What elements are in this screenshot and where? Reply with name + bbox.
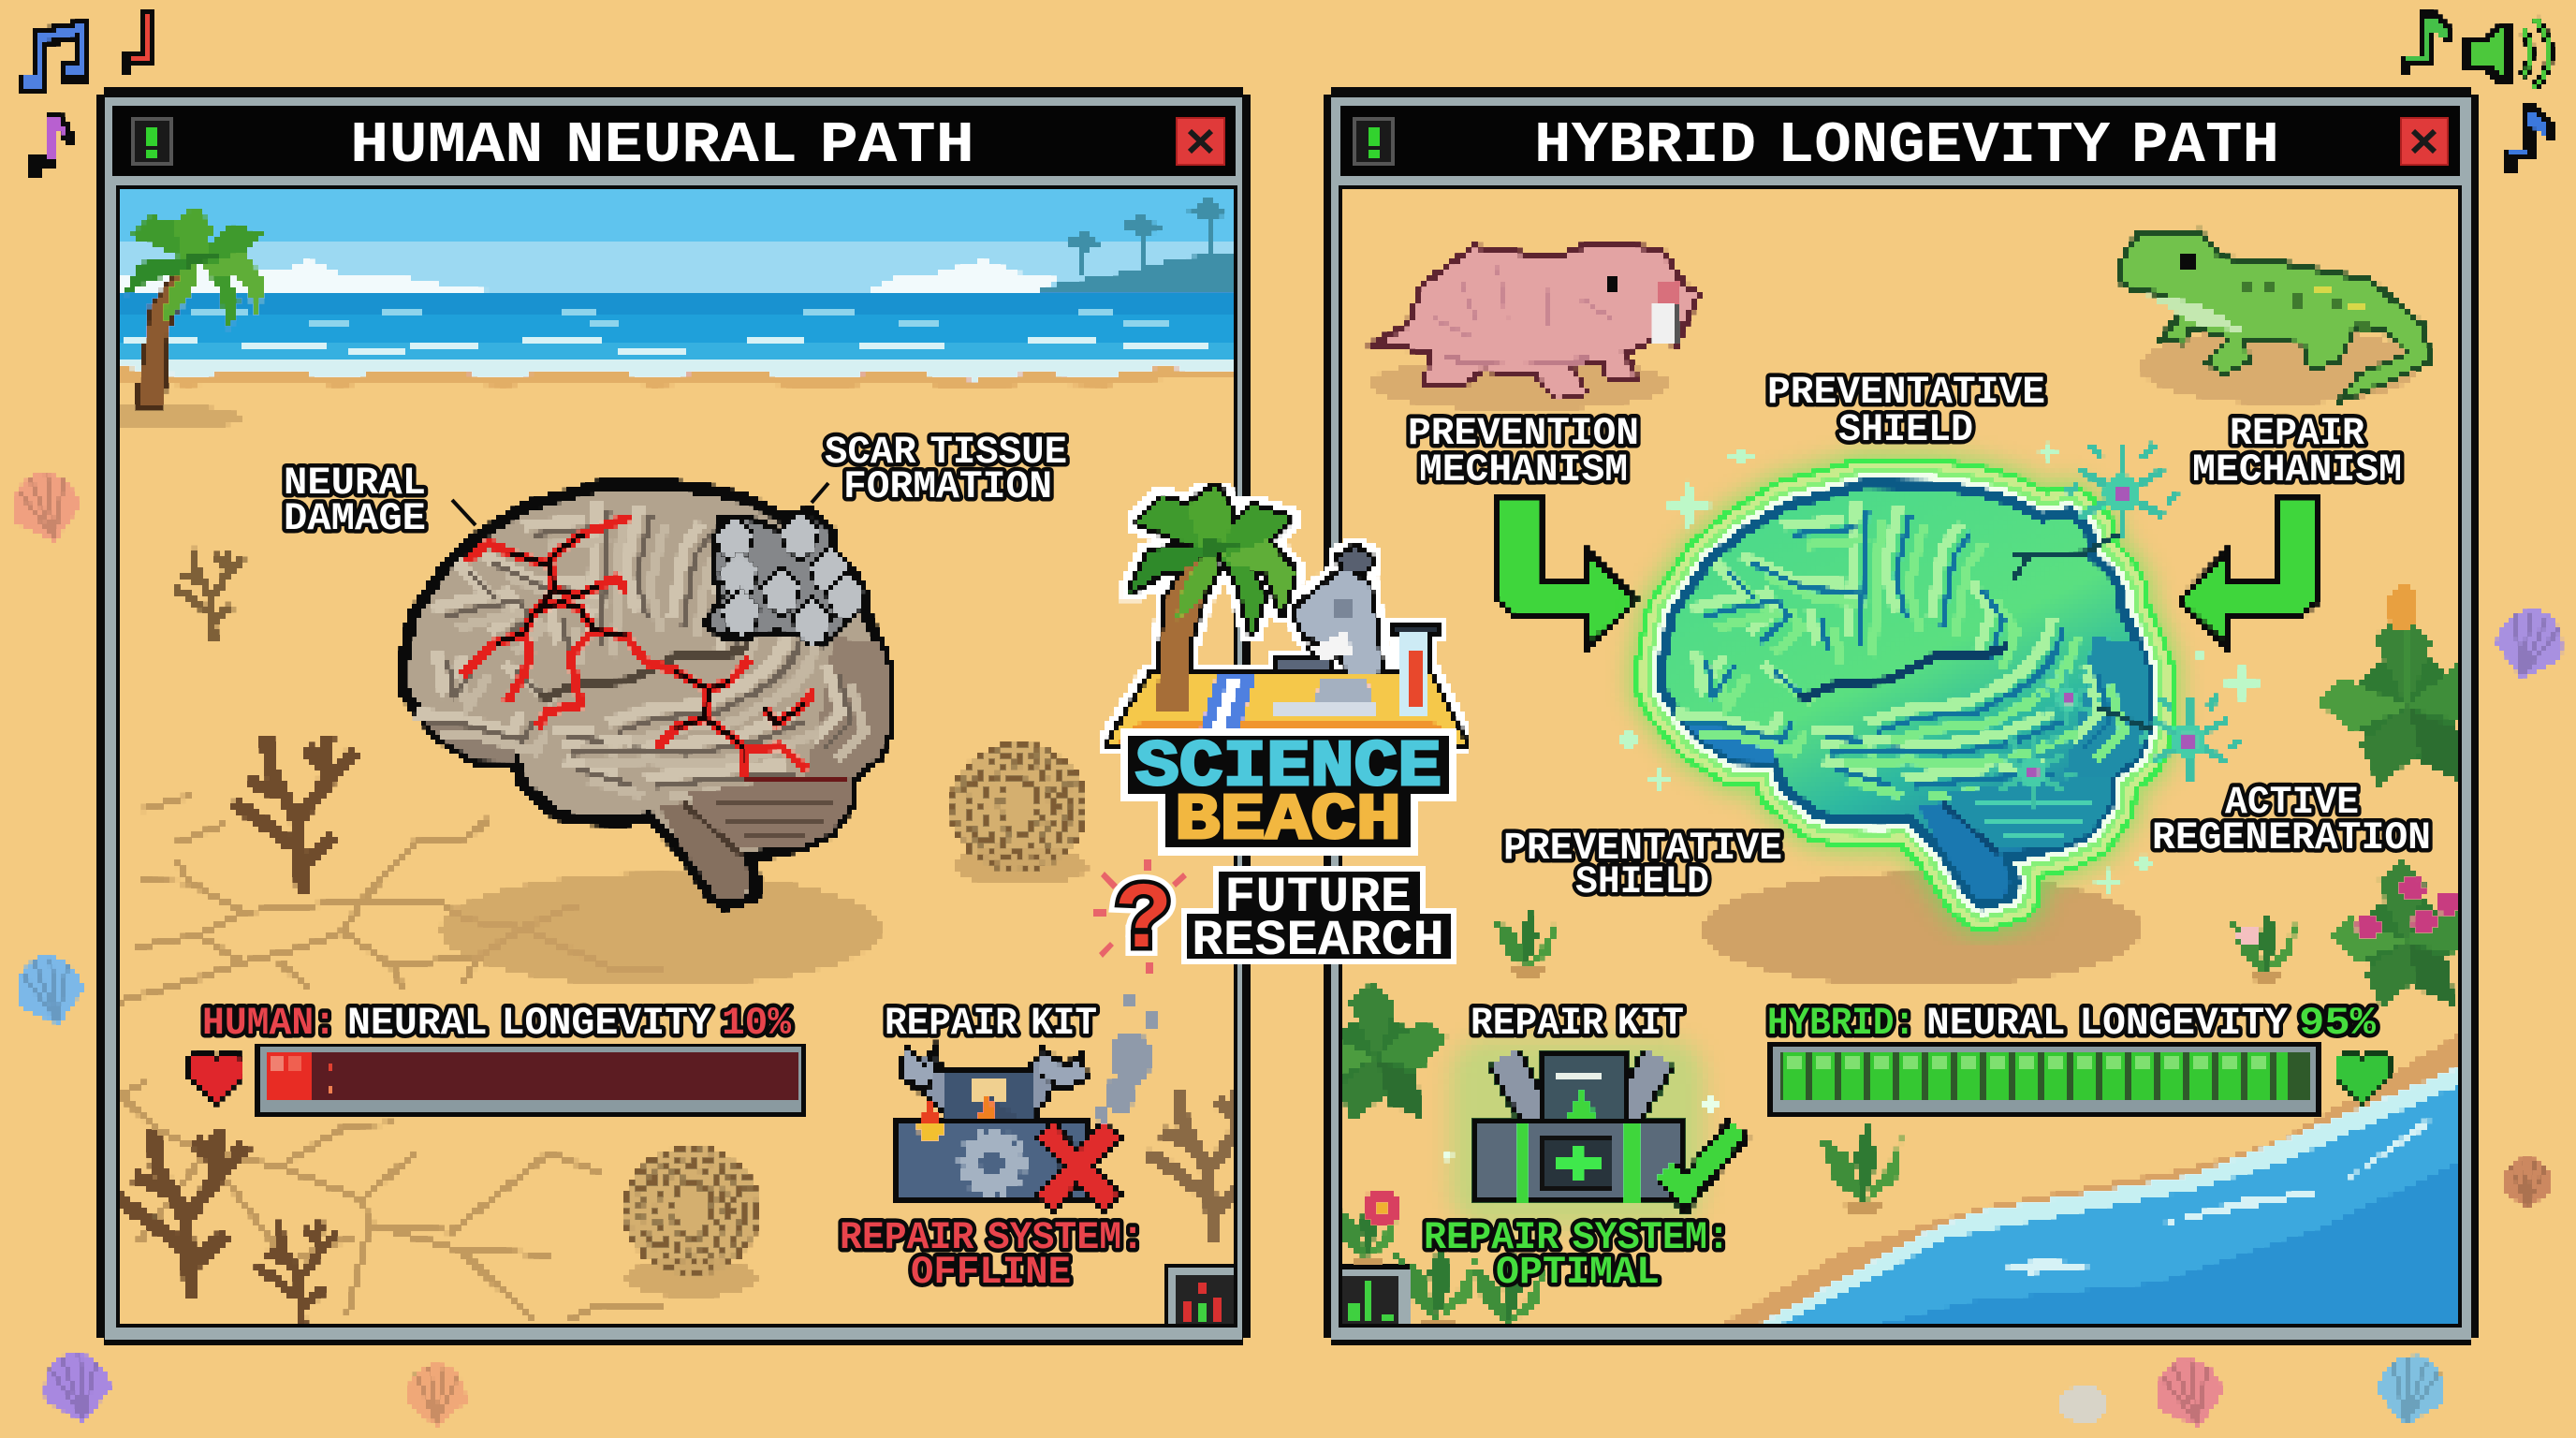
- label preventative shield top: SHIELD: [1838, 407, 1973, 452]
- label prevention mechanism: [1408, 411, 1639, 492]
- red x mark: [1044, 1129, 1112, 1204]
- ocean corner: [1720, 1034, 2460, 1326]
- repair status left: REPAIR SYSTEM:: [840, 1215, 1144, 1260]
- optimal repair kit: [1439, 1039, 1739, 1226]
- label preventative shield bottom: PREVENTATIVE: [1503, 826, 1782, 871]
- label repair mechanism: REPAIR: [2230, 411, 2365, 456]
- sparkles: [1612, 442, 2266, 896]
- label repair mechanism: [2192, 411, 2402, 492]
- heart green: [2336, 1052, 2389, 1103]
- question icon: ?: [1116, 870, 1172, 976]
- damaged brain: [403, 484, 889, 905]
- green check mark: [1663, 1128, 1739, 1194]
- label neural damage: [284, 461, 476, 541]
- question icon: ?: [1116, 870, 1172, 976]
- status widget left: [1164, 1264, 1236, 1326]
- hybrid longevity label: HYBRID:: [1767, 1001, 1915, 1046]
- header left: indicator and close: [133, 118, 1224, 165]
- neural cracks: [462, 517, 813, 777]
- repair status right: [1424, 1215, 1730, 1295]
- arrow right: [2180, 500, 2318, 648]
- lizard repair animal: [2120, 231, 2430, 404]
- hybrid longevity label: NEURAL LONGEVITY: [1926, 1001, 2289, 1046]
- question icon: [1093, 859, 1187, 976]
- shadows on sand: [118, 403, 1088, 1297]
- repair kit label left: REPAIR KIT: [885, 1001, 1097, 1046]
- title left: HUMAN NEURAL PATH: [350, 112, 974, 179]
- repair status right: REPAIR SYSTEM:: [1424, 1215, 1730, 1260]
- panel: human neural path: [96, 87, 1258, 1345]
- repair kit label right: REPAIR KIT: [1471, 1001, 1684, 1046]
- human longevity label: [202, 1001, 792, 1046]
- label scar tissue: [812, 430, 1067, 509]
- label active regeneration: [2152, 780, 2431, 860]
- panel: hybrid longevity path: [1305, 87, 2496, 1345]
- future research label: FUTURE: [1224, 870, 1412, 927]
- label neural damage: DAMAGE: [284, 496, 426, 541]
- beach sky and sea: [118, 187, 1236, 389]
- label neural damage: NEURAL: [284, 461, 426, 506]
- ground cracks: [120, 796, 661, 1320]
- scar tissue: [705, 511, 865, 646]
- arrow left: [1499, 500, 1635, 648]
- icon: shells: [4, 464, 2572, 1436]
- palm: [1155, 562, 1213, 712]
- label scar tissue: SCAR TISSUE: [825, 430, 1067, 475]
- icon: green speaker: [2464, 19, 2550, 88]
- dead trees: [123, 552, 1258, 1325]
- future research label: RESEARCH: [1192, 913, 1444, 970]
- microscope: [1273, 548, 1381, 716]
- label active regeneration: REGENERATION: [2152, 815, 2431, 860]
- human longevity label: NEURAL LONGEVITY: [347, 1001, 712, 1046]
- label prevention mechanism: PREVENTION: [1408, 411, 1639, 456]
- label active regeneration: ACTIVE: [2225, 780, 2359, 825]
- ground shadow: [1702, 873, 2142, 986]
- future research label: [1181, 866, 1456, 970]
- island: [1107, 675, 1467, 746]
- title right: HYBRID LONGEVITY PATH: [1534, 112, 2279, 179]
- label preventative shield bottom: [1503, 826, 1782, 904]
- label scar tissue: FORMATION: [843, 464, 1052, 509]
- label preventative shield top: [1767, 370, 2045, 452]
- logo artwork: [1107, 485, 1467, 746]
- regenerating brain: [1612, 442, 2266, 905]
- central logo: science beach: [1093, 485, 1467, 976]
- green arrows: [1499, 500, 2318, 648]
- icon: green music note: [2401, 11, 2452, 75]
- hybrid longevity bar: [1767, 1042, 2321, 1117]
- repair status right: OPTIMAL: [1496, 1250, 1660, 1295]
- hybrid longevity label: [1767, 1001, 2377, 1046]
- label preventative shield top: PREVENTATIVE: [1767, 370, 2045, 415]
- neurons: [1990, 445, 2240, 807]
- test tube: [1395, 625, 1436, 715]
- icon: blue music note right: [2503, 105, 2554, 171]
- heart red: [189, 1052, 242, 1103]
- label repair mechanism: MECHANISM: [2192, 448, 2402, 492]
- plants: [1305, 586, 2496, 1333]
- human longevity bar: [255, 1044, 806, 1117]
- logo beach text: BEACH: [1175, 785, 1401, 858]
- broken repair kit: [894, 994, 1160, 1204]
- window frame left: [96, 87, 1251, 1345]
- label preventative shield bottom: SHIELD: [1575, 859, 1709, 904]
- header right: indicator and close: [1354, 118, 2448, 165]
- mole rat prevention animal: [1369, 242, 1699, 410]
- human longevity label: HUMAN:: [202, 1001, 336, 1046]
- icon: blue music notes: [17, 17, 91, 94]
- window frame right: [1324, 87, 2479, 1345]
- tumbleweeds: [624, 743, 1086, 1274]
- smoke: [1096, 994, 1160, 1123]
- status widget right: [1340, 1266, 1412, 1326]
- repair status left: [840, 1215, 1144, 1295]
- repair status left: OFFLINE: [911, 1250, 1071, 1295]
- human longevity label: 10%: [722, 1001, 792, 1046]
- icon: red music note: [124, 11, 155, 73]
- label prevention mechanism: MECHANISM: [1419, 448, 1628, 492]
- icon: purple music note: [28, 112, 75, 176]
- logo science text: SCIENCE: [1135, 731, 1442, 805]
- hybrid longevity label: 95%: [2299, 1001, 2377, 1046]
- palm tree: [122, 203, 268, 406]
